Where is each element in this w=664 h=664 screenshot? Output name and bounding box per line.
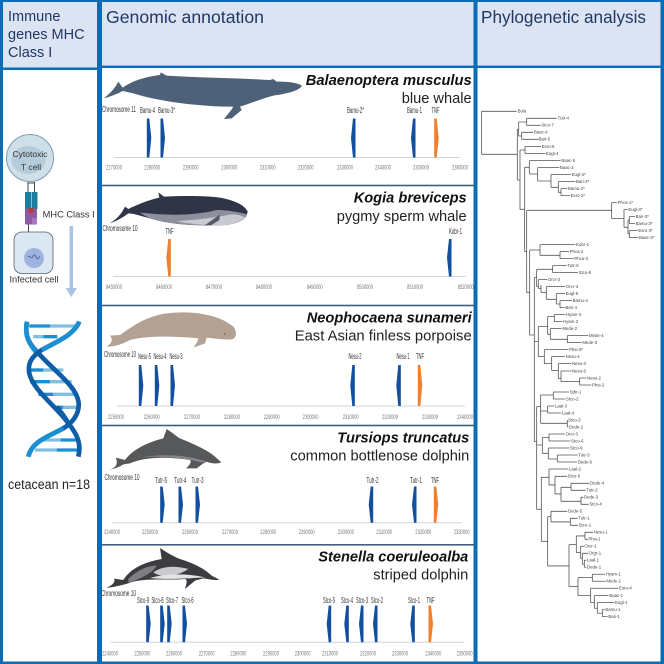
panel: immune genes header: Immune [8,9,60,25]
panel: Tursiops truncatus [104,429,470,536]
panel: phylogenetic analysis header [477,2,662,65]
gene map: Kobr-1 [449,227,462,236]
gene map: 2330000 [422,414,438,421]
gene map: Nesu-4 [154,352,167,361]
gene map: 8470000 [206,284,222,291]
tree tip labels: Eugl-4 [546,151,559,156]
panel: immune genes header: Class I [8,45,52,61]
tree tip labels: Tutr-5 [567,263,579,268]
chart: phylogenetic tree [482,109,655,619]
gene map [106,106,468,172]
tree tip labels: Laal-4 [562,410,575,415]
gene map: Stco-1 [408,596,420,605]
gene map: Stco-5 [323,596,335,605]
icon: pygmy sperm whale [109,192,248,226]
gene map [102,596,473,658]
gene map: Bamu-3* [158,106,175,115]
gene map: 2270000 [184,414,200,421]
tree tip labels: Phsi-1 [588,537,601,542]
common name: East Asian finless porpoise [295,328,472,345]
gene map: Tutr-1 [410,476,422,485]
gene map: 2260000 [166,650,182,658]
tree tip labels: Hyam-3 [566,312,582,317]
tree tip labels: Bamu-3* [636,221,653,226]
icon: cytotoxic T cell [6,134,54,182]
label: chromosome: Chromosome 10 [104,350,136,359]
gene map: 2300000 [295,650,311,658]
tree tip labels: Hyam-2 [563,319,579,324]
gene map: Stco-7 [166,596,178,605]
tree tip labels: Dede-5 [568,509,583,514]
gene map: Stco-3 [356,596,368,605]
icon: cytotoxic T cell: Cytotoxic [13,149,48,159]
label: infected cell: Infected cell [10,275,58,285]
gene map: 2290000 [299,529,315,536]
label: chromosome: Chromosome 10 [102,224,138,233]
tree tip labels: Stbr-1 [570,389,582,394]
tree tip labels: Dede-1 [587,565,602,570]
gene map: Stco-2 [371,596,383,605]
tree tip labels: Nesu-4 [566,354,580,359]
tree tip labels: Eugl-2* [572,172,586,177]
gene map: 2340000 [375,164,391,172]
panel: immune genes header: genes MHC [8,27,85,43]
gene map: 2320000 [298,164,314,172]
gene map: Nesu-2 [348,352,362,361]
icon: infected cell [14,232,53,274]
gene map: 8450000 [106,284,122,291]
tree tip labels: Laal-3 [555,403,568,408]
tree tip labels: Orcr-4 [566,284,579,289]
icon: striped dolphin [106,548,219,589]
gene map: 2290000 [263,650,279,658]
gene map: 2280000 [224,414,240,421]
gene map: 2350000 [413,164,429,172]
gene map: 2340000 [457,414,473,421]
panel: Balaenoptera musculus [102,72,472,172]
tree tip labels: Laal-1 [587,558,600,563]
gene map: 2320000 [360,650,376,658]
gene map: 2310000 [343,414,359,421]
arrow: down [66,226,77,297]
gene map: 2260000 [182,529,198,536]
tree tip labels: Bamu-1 [605,607,621,612]
tree tip labels: Baac-5 [561,158,576,163]
tree tip labels: Tutr-4 [558,116,570,121]
panel: genomic annotation header [101,2,474,65]
tree tip labels: Orgr-1 [589,551,602,556]
tree tip labels: Tutr-1 [578,516,590,521]
gene map: Bamu-2* [347,106,364,115]
gene map [108,352,473,421]
gene map: Stco-6 [182,596,194,605]
icon: DNA double helix [26,322,79,457]
gene map: Tutr-3 [192,476,204,485]
tree tip labels: Bari-1 [608,614,620,619]
tree tip labels: Stco-2 [566,396,579,401]
gene map [104,476,470,536]
gene map: 2310000 [376,529,393,536]
tree tip labels: Orcr-3 [566,431,579,436]
label: chromosome: Chromosome 10 [104,473,140,482]
gene map: Nesu-5 [138,352,151,361]
tree tip labels: Nesu-3 [572,361,587,366]
tree tip labels: Bari-3* [636,214,649,219]
tree tip labels: Bari-5 [539,137,551,142]
gene map: TNF [166,227,174,236]
tree tip labels: Phca-3 [574,256,589,261]
tree tip labels: Eugl-1 [615,600,628,605]
tree tip labels: Bari-2* [576,179,590,184]
tree tip labels: Stco-8 [579,270,592,275]
tree tip labels: Esro-4 [619,586,632,591]
label: chromosome: Chromosome 11 [102,105,136,114]
gene map: 8480000 [256,284,272,291]
label: sample size: cetacean n=18 [8,477,90,492]
tree tip labels: Stco-4 [589,502,602,507]
tree tip labels: Phsi-2 [592,382,605,387]
tree tip labels: Dede-6 [578,459,592,464]
gene map: 2350000 [456,650,473,658]
tree tip labels: Esro-2* [571,193,585,198]
common name: blue whale [402,90,472,107]
tree tip labels: Stco-5 [568,474,581,479]
tree tip labels: Mede-3 [582,340,598,345]
species name: Kogia breviceps [354,190,467,207]
icon: bottlenose dolphin [110,429,221,470]
gene map: 2340000 [425,650,442,658]
gene map: TNF [431,476,439,485]
tree tip labels: Bamu-2* [568,186,585,191]
tree tip labels: Tutr-2 [586,488,598,493]
tree tip labels: Eugl-5 [566,291,579,296]
gene map: 2320000 [382,414,398,421]
gene map: 2270000 [106,164,122,172]
panel: phylogenetic analysis header: Phylogenetic analysis [481,7,646,27]
tree tip labels: Mede-1 [606,579,622,584]
tree tip labels: Orcr-1 [584,544,597,549]
gene map: 2270000 [199,650,215,658]
gene map: Tutr-2 [366,476,379,485]
panel: immune genes header [2,2,98,68]
gene map: Stco-9 [137,596,149,605]
tree tip labels: Mede-4 [589,333,604,338]
panel: Kogia breviceps [102,190,474,291]
tree tip labels: Stco-7 [541,123,554,128]
tree tip labels: Stco-3 [568,417,581,422]
tree tip labels: Baac-4 [534,130,548,135]
gene map: TNF [426,596,435,605]
diagram: T cell and MHC Class I [6,134,95,297]
tree tip labels: Hyam-1 [606,572,621,577]
tree tip labels: Baac-1 [609,593,624,598]
gene map: 2280000 [144,164,161,172]
panel: Neophocaena sunameri [104,310,473,421]
tree tip labels: Bamu-4 [573,298,588,303]
gene map: 2300000 [338,529,354,536]
icon: cytotoxic T cell: T cell [21,162,41,172]
tree tip labels: Eugl-3* [628,207,643,212]
tree tip labels: Nesu-5 [572,368,587,373]
tree tip labels: Esro-5 [542,144,555,149]
tree tip labels: Kobr-1 [576,242,590,247]
gene map: 2290000 [183,164,199,172]
gene map: 2250000 [134,650,151,658]
gene map: Nesu-3 [170,352,183,361]
tree tip labels: Nesu-2 [587,375,602,380]
gene map: Bamu-4 [140,106,155,115]
gene map: 2250000 [108,414,124,421]
gene map: 2290000 [264,414,280,421]
gene map: 2330000 [337,164,353,172]
gene map: 2280000 [260,529,277,536]
gene map: 2320000 [415,529,432,536]
gene map: 2360000 [452,164,468,172]
tree tip labels: Dede-3 [584,495,599,500]
tree tip labels: Phsi-3* [569,347,583,352]
gene map: TNF [432,106,440,115]
common name: common bottlenose dolphin [290,447,469,464]
gene map: 2330000 [392,650,408,658]
gene map: 2310000 [322,650,338,658]
tree tip labels: Esro-3* [638,228,653,233]
gene map: 2270000 [222,529,238,536]
tree tip labels: Bari-4 [565,305,577,310]
tree tip labels: Mede-2 [562,326,578,331]
tree tip labels: Dede-2 [569,424,584,429]
species name: Balaenoptera musculus [306,72,472,89]
gene map: 8510000 [407,284,423,291]
species name: Tursiops truncatus [337,430,469,447]
tree tip labels: Bola [518,109,527,114]
species name: Neophocaena sunameri [307,310,473,327]
gene map: 8460000 [156,284,172,291]
gene map: Bamu-1 [407,106,422,115]
species name: Stenella coeruleoalba [318,548,468,565]
common name: striped dolphin [373,567,468,584]
tree tip labels: Stco-9 [570,445,583,450]
gene map: TNF [416,352,424,361]
gene map [106,227,474,291]
panel: genomic annotation header: Genomic annotation [106,7,264,27]
gene map: Tutr-4 [174,476,187,485]
icon: receptor and MHC [25,182,38,232]
tree tip labels: Phca-1* [618,200,633,205]
gene map: 2300000 [221,164,238,172]
tree tip labels: Tutr-3 [578,452,590,457]
label: MHC Class I: MHC Class I [43,210,95,220]
tree tip labels: Phca-2 [570,249,584,254]
gene map: 2260000 [144,414,160,421]
tree tip labels: Orcr-2 [548,277,561,282]
gene map: Stco-8 [152,596,164,605]
gene map: Stco-4 [341,596,353,605]
gene map: 8490000 [307,284,323,291]
gene map: Tutr-5 [155,476,167,485]
gene map: 2300000 [302,414,319,421]
icon: finless porpoise [107,312,236,348]
gene map: 2330000 [454,529,470,536]
gene map: 2240000 [102,650,118,658]
tree tip labels: Nesu-1 [594,530,608,535]
common name: pygmy sperm whale [337,208,467,225]
tree tip labels: Stco-1 [579,523,592,528]
panel: Stenella coeruleoalba [101,548,473,658]
gene map: 2280000 [230,650,247,658]
tree tip labels: Stco-6 [571,438,584,443]
tree tip labels: Baac-2 [560,165,574,170]
gene map: 8500000 [357,284,373,291]
gene map: 2250000 [142,529,158,536]
gene map: 2310000 [260,164,276,172]
gene map: 2240000 [104,529,120,536]
tree tip labels: Laal-2 [569,466,582,471]
gene map: 8520000 [458,284,474,291]
tree tip labels [518,109,655,619]
icon: blue whale [104,72,302,119]
tree tip labels: Dede-4 [590,481,605,486]
tree tip labels: Baac-3* [639,235,655,240]
gene map: Nesu-1 [396,352,410,361]
label: chromosome: Chromosome 10 [101,589,136,598]
